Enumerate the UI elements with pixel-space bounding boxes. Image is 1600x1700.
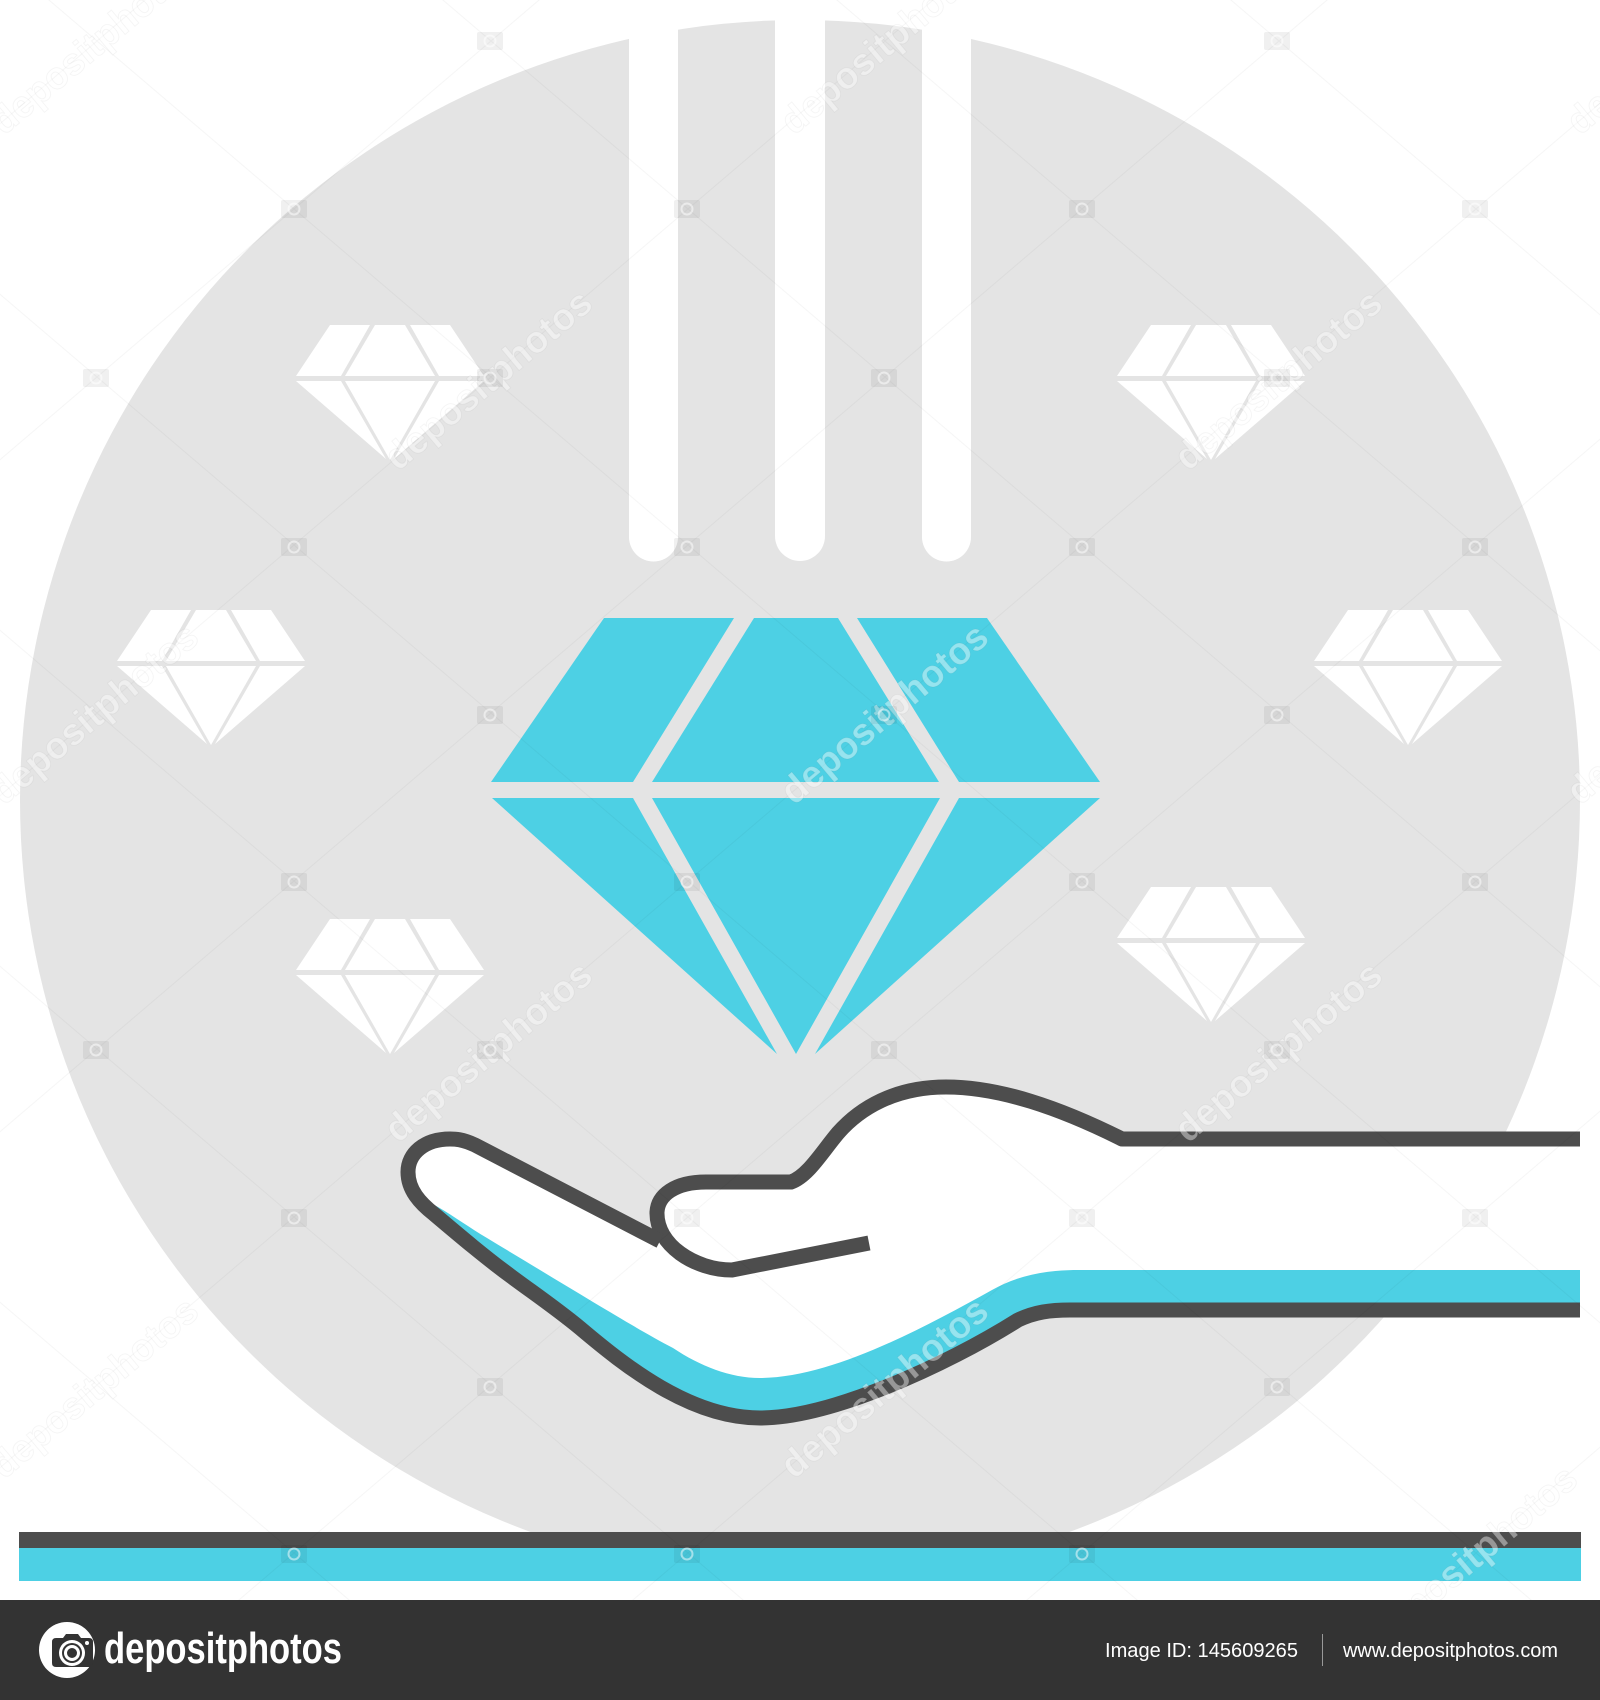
watermark text: depositphotos [1167, 954, 1391, 1151]
footer bar [0, 1600, 1600, 1700]
watermark text: depositphotos [377, 954, 601, 1151]
open hand [408, 1087, 1580, 1418]
small white diamonds [117, 325, 1502, 1054]
watermark text: depositphotos [773, 616, 997, 813]
falling light bars [629, 0, 971, 562]
image id: Image ID: 145609265 [1105, 1640, 1298, 1662]
watermark text: depositphotos [773, 1290, 997, 1487]
site url: www.depositphotos.com [1342, 1640, 1558, 1662]
large cyan diamond [491, 618, 1100, 1054]
ground bars [19, 1532, 1581, 1581]
watermark text: depositphotos [1167, 282, 1391, 479]
footer divider [1322, 1634, 1323, 1666]
watermark text: depositphotos [1362, 1458, 1586, 1655]
watermark text: depositphotos [377, 282, 601, 479]
icon: depositphotos camera logo [39, 1622, 95, 1678]
watermark camera icons [83, 32, 1488, 1563]
logo wordmark: depositphotos [104, 1624, 342, 1673]
